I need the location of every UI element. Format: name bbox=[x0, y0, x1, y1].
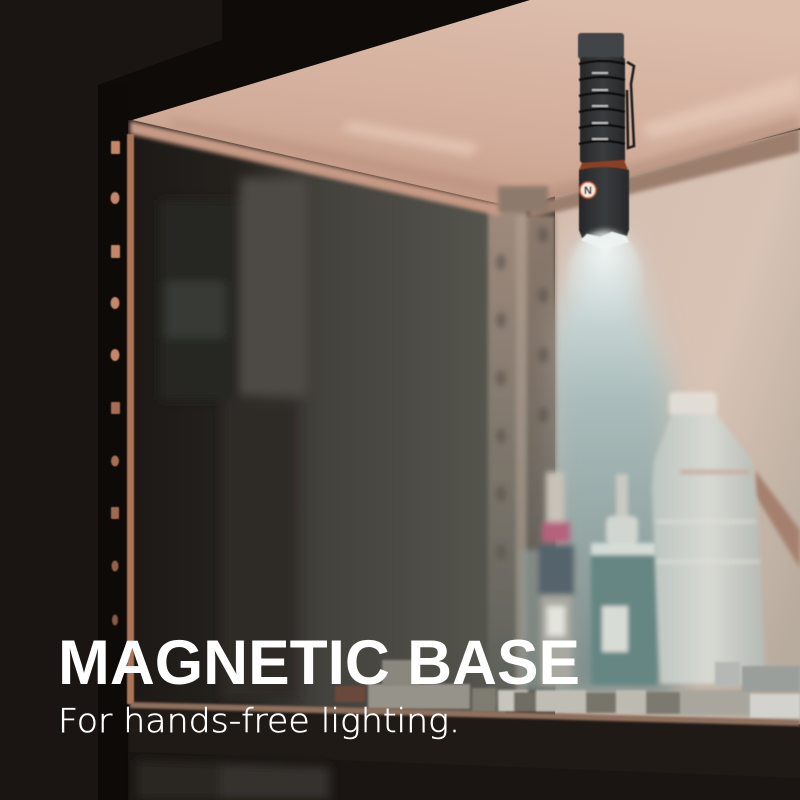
back wall of shelf bbox=[134, 136, 505, 715]
ceiling highlight bbox=[170, 75, 800, 205]
small bottle, left bbox=[520, 472, 578, 690]
flashlight tail cap bbox=[578, 33, 624, 59]
N logo badge: N bbox=[584, 185, 592, 197]
top dark beam bbox=[98, 0, 530, 120]
wall-mounted box on back wall bbox=[160, 178, 308, 700]
lens glow bbox=[581, 232, 629, 250]
shelf front, lower bbox=[130, 705, 800, 778]
grip ribs bbox=[579, 61, 625, 144]
large white bottle bbox=[652, 392, 766, 684]
green bottle, middle bbox=[591, 474, 657, 685]
light beam from flashlight bbox=[548, 240, 680, 700]
front lip of ceiling bbox=[130, 121, 800, 219]
small metal parts on shelf bbox=[335, 660, 800, 718]
N logo badge bbox=[580, 182, 596, 198]
ribbed grip bbox=[580, 57, 625, 163]
flashlight head bbox=[579, 167, 629, 238]
post holes bbox=[110, 141, 120, 626]
left post bbox=[98, 85, 128, 800]
shelf top lip bbox=[130, 702, 800, 726]
ceiling of shelf bbox=[132, 0, 800, 204]
pocket clip bbox=[627, 62, 634, 148]
left post copper edge bbox=[127, 134, 134, 704]
post slots bbox=[496, 227, 548, 560]
flashlight bbox=[578, 33, 634, 250]
below-shelf area bbox=[136, 760, 330, 800]
shelf post, right bbox=[488, 205, 556, 705]
subheading: For hands-free lighting. bbox=[58, 701, 460, 740]
orange ring bbox=[579, 160, 628, 170]
diagonal brace on right wall bbox=[755, 470, 800, 568]
heading: MAGNETIC BASE bbox=[58, 628, 580, 698]
right wall bbox=[555, 130, 800, 725]
flashlight glow bbox=[567, 230, 643, 330]
grip highlights bbox=[592, 72, 608, 140]
